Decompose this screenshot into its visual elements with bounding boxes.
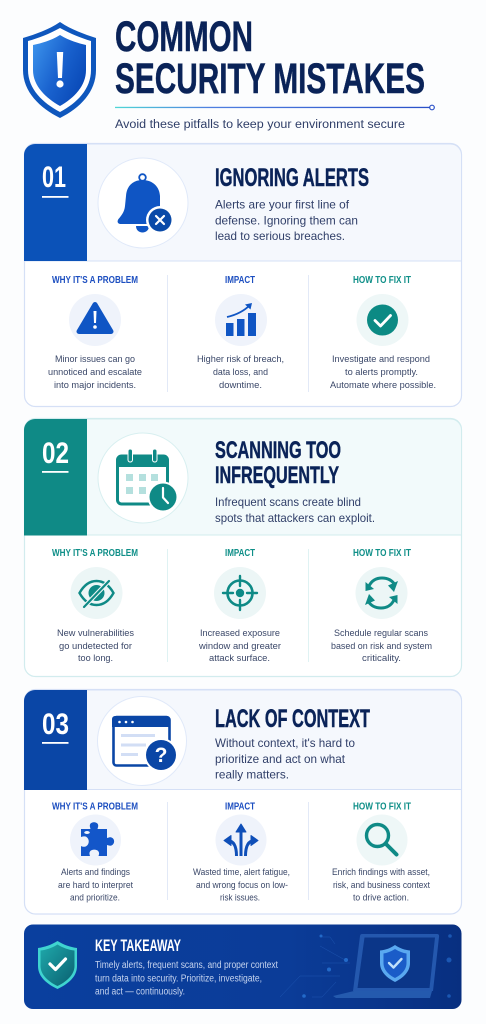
- column: why it's a problem: are hard to interpret: [58, 880, 133, 891]
- column: why it's a problem: [48, 274, 142, 391]
- icon: magnifying glass: [356, 814, 408, 866]
- column: how to fix it: risk, and business context: [333, 880, 430, 891]
- column: why it's a problem: unnoticed and escalate: [48, 367, 142, 378]
- icon: rising bar chart: [215, 294, 267, 346]
- panel: 03 lack of context: [24, 690, 462, 914]
- column: why it's a problem: WHY IT'S A PROBLEM: [52, 547, 138, 559]
- panel: key takeaway: [24, 924, 462, 1009]
- title: COMMON: [115, 13, 253, 61]
- description: prioritize and act on what: [215, 752, 346, 766]
- takeaway text: turn data into security. Prioritize, investigate,: [95, 974, 262, 984]
- column: why it's a problem: WHY IT'S A PROBLEM: [52, 800, 138, 812]
- number badge 03: [24, 690, 87, 790]
- column: why it's a problem: Minor issues can go: [55, 354, 135, 365]
- column: how to fix it: to drive action.: [353, 892, 409, 904]
- description: [215, 198, 358, 243]
- column: how to fix it: based on risk and system: [331, 641, 432, 652]
- takeaway text: and act — continuously.: [95, 986, 185, 998]
- description: [215, 736, 355, 782]
- description: Alerts are your first line of: [215, 198, 350, 212]
- takeaway text: Timely alerts, frequent scans, and proper context: [95, 960, 278, 971]
- description: Infrequent scans create blind: [215, 495, 361, 509]
- number badge 02: [24, 419, 87, 536]
- column: how to fix it: HOW TO FIX IT: [353, 274, 411, 286]
- icon: crossed-out eye: [70, 567, 122, 619]
- heading: IGNORING ALERTS: [215, 164, 369, 192]
- column: why it's a problem: and prioritize.: [70, 892, 120, 904]
- column: impact: window and greater: [198, 641, 281, 652]
- description: really matters.: [215, 768, 289, 782]
- column: impact: Higher risk of breach,: [197, 354, 284, 365]
- column: impact: IMPACT: [225, 274, 255, 286]
- icon: laptop with shield: [333, 934, 439, 998]
- column: impact: attack surface.: [209, 653, 270, 664]
- column: how to fix it: HOW TO FIX IT: [353, 547, 411, 559]
- column: impact: downtime.: [219, 380, 262, 391]
- column: why it's a problem: [52, 547, 138, 664]
- icon: diverging arrows: [216, 814, 266, 866]
- column: how to fix it: [330, 274, 436, 391]
- column: why it's a problem: too long.: [78, 653, 113, 664]
- circuit decoration: [280, 934, 452, 998]
- icon: crosshair target: [214, 567, 266, 619]
- number badge 02: 02: [42, 437, 69, 470]
- column: impact: and wrong focus on low-: [196, 880, 288, 891]
- takeaway heading: KEY TAKEAWAY: [95, 936, 181, 955]
- subtitle: Avoid these pitfalls to keep your environment secure: [115, 119, 405, 131]
- column: why it's a problem: go undetected for: [59, 641, 132, 652]
- icon: refresh arrows: [356, 567, 408, 619]
- column: how to fix it: Schedule regular scans: [334, 628, 428, 639]
- icon: teal shield check: [38, 941, 77, 989]
- column: impact: [198, 547, 281, 664]
- title underline: [115, 105, 434, 110]
- column: impact: risk issues.: [220, 892, 260, 904]
- column: how to fix it: Automate where possible.: [330, 380, 436, 391]
- takeaway text: [95, 960, 278, 998]
- icon: window with question mark: [98, 696, 186, 786]
- heading: SCANNING TOO: [215, 437, 341, 464]
- column: why it's a problem: New vulnerabilities: [57, 628, 134, 639]
- column: why it's a problem: into major incidents.: [54, 380, 136, 391]
- heading: [215, 437, 341, 489]
- icon: calendar with clock: [98, 433, 188, 523]
- column: impact: data loss, and: [213, 367, 268, 378]
- icon: bell with x badge: [98, 158, 188, 248]
- description: lead to serious breaches.: [215, 229, 345, 243]
- column: how to fix it: Enrich findings with asset,: [332, 867, 430, 878]
- column: how to fix it: [331, 547, 432, 664]
- heading: LACK OF CONTEXT: [215, 705, 370, 733]
- header: [23, 13, 434, 131]
- column: impact: Increased exposure: [200, 628, 280, 639]
- column: impact: Wasted time, alert fatigue,: [193, 867, 290, 878]
- description: spots that attackers can exploit.: [215, 511, 375, 525]
- column: how to fix it: [332, 800, 430, 904]
- icon: shield with exclamation mark: [23, 22, 96, 118]
- column: how to fix it: to alerts promptly.: [345, 367, 418, 378]
- column: impact: IMPACT: [225, 547, 255, 559]
- heading: INFREQUENTLY: [215, 462, 339, 489]
- icon: window with question mark: ?: [155, 744, 167, 767]
- number badge 01: 01: [42, 161, 66, 194]
- title: [115, 13, 425, 103]
- column: why it's a problem: [52, 800, 138, 904]
- column: how to fix it: criticality.: [362, 653, 401, 664]
- number badge 03: 03: [42, 708, 69, 741]
- description: defense. Ignoring them can: [215, 214, 358, 228]
- panel: 02 scanning too infrequently: [24, 418, 462, 676]
- description: [215, 495, 375, 525]
- column: how to fix it: HOW TO FIX IT: [353, 800, 411, 812]
- column: why it's a problem: Alerts and findings: [61, 867, 130, 878]
- icon: warning triangle: [69, 294, 121, 346]
- column: impact: IMPACT: [225, 800, 255, 812]
- panel: 01 ignoring alerts: [24, 144, 462, 406]
- column: impact: [197, 274, 284, 391]
- icon: check circle: [356, 294, 408, 346]
- column: how to fix it: Investigate and respond: [332, 354, 430, 365]
- icon: puzzle piece: [70, 814, 121, 866]
- number badge 01: [24, 144, 87, 261]
- description: Without context, it's hard to: [215, 736, 355, 750]
- column: impact: [193, 800, 290, 904]
- column: why it's a problem: WHY IT'S A PROBLEM: [52, 274, 138, 286]
